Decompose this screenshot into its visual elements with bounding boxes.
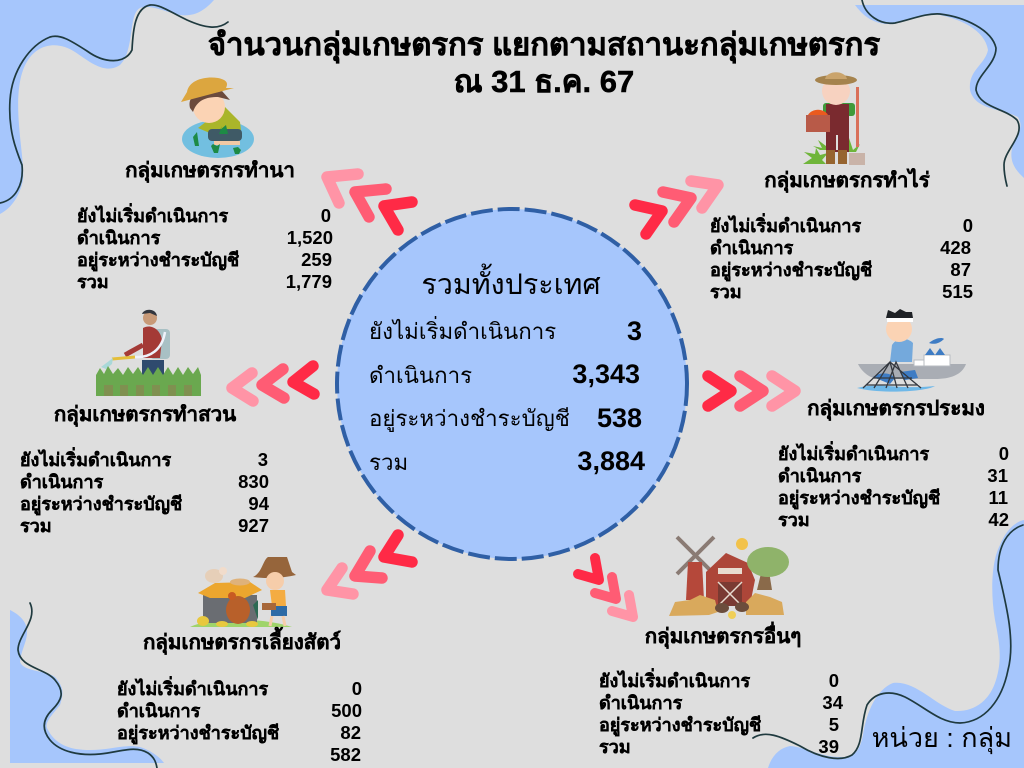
panel: field crop group figures: 87 [950,259,971,280]
heading: fishery group: กลุ่มเกษตรกรประมง [807,397,985,421]
decorative corner: bottom left [10,603,164,768]
heading: other group: กลุ่มเกษตรกรอื่นๆ [645,621,801,649]
panel: livestock group figures: อยู่ระหว่างชำระบัญชี [117,723,279,745]
panel: field crop group figures: ดำเนินการ [710,238,794,258]
panel: livestock group figures: 500 [331,700,362,721]
panel: orchard group figures [20,447,270,536]
panel: national total circle [337,209,687,559]
panel: other group figures: ดำเนินการ [599,693,683,713]
arrows: to livestock group [327,535,412,594]
national row: operating [369,359,640,389]
arrows: to rice group [327,174,412,230]
national row: total: รวม [369,450,408,475]
unit note: หน่วย : กลุ่ม [872,723,1012,755]
national row: liquidating: อยู่ระหว่างชำระบัญชี [369,406,570,432]
national row: not started: ยังไม่เริ่มดำเนินการ [369,316,556,344]
panel: livestock group figures: 82 [340,722,361,743]
decorative corner: top right [855,0,1024,186]
national row: operating: ดำเนินการ [369,363,472,388]
arrows: to orchard group [232,366,314,401]
panel: rice group figures: ดำเนินการ [77,228,161,248]
panel: other group figures: 5 [829,714,839,735]
decorative corner: bottom right [753,520,1024,768]
panel: rice group figures: รวม [77,272,109,292]
panel: livestock group figures: ยังไม่เริ่มดำเนินการ [117,676,269,699]
heading: national total: รวมทั้งประเทศ [421,264,601,301]
national row: operating: 3,343 [572,359,640,389]
panel: other group figures: ยังไม่เริ่มดำเนินการ [599,668,751,691]
title: ณ 31 ธ.ค. 67 [454,64,634,99]
national row: not started: 3 [627,316,642,346]
national row: liquidating: 538 [597,403,642,433]
title [208,27,880,99]
panel: livestock group figures: ดำเนินการ [117,701,201,721]
panel: orchard group figures: 927 [238,515,269,536]
panel: rice group figures: 0 [321,205,331,226]
panel: livestock group figures: 0 [352,678,362,699]
panel: other group figures: 39 [818,736,839,757]
panel: rice group figures: 259 [301,249,332,270]
panel: rice group figures: อยู่ระหว่างชำระบัญชี [77,250,239,272]
panel: fishery group figures: 0 [999,443,1009,464]
icon: field crop farmer [803,72,865,165]
panel: fishery group figures [778,441,1009,530]
panel: field crop group figures [710,213,973,302]
panel: field crop group figures: 428 [940,237,971,258]
icon: farm barn [669,537,789,619]
panel: field crop group figures: รวม [710,282,742,302]
icon: poultry farmer [190,557,296,627]
panel: rice group figures: 1,779 [286,271,332,292]
panel: orchard group figures: ดำเนินการ [20,472,104,492]
panel: fishery group figures: ยังไม่เริ่มดำเนินการ [778,441,930,464]
heading: orchard group: กลุ่มเกษตรกรทำสวน [54,403,236,427]
panel: fishery group figures: 31 [987,465,1008,486]
panel: rice group figures: ยังไม่เริ่มดำเนินการ [77,203,229,226]
panel: other group figures: อยู่ระหว่างชำระบัญชี [599,715,761,737]
panel: orchard group figures: อยู่ระหว่างชำระบัญชี [20,494,182,516]
panel: fishery group figures: อยู่ระหว่างชำระบัญชี [778,488,940,510]
arrows: to fishery group [708,376,795,406]
heading: rice group: กลุ่มเกษตรกรทำนา [125,159,295,183]
panel: livestock group figures [117,676,362,765]
panel: field crop group figures: 515 [942,281,973,302]
panel: field crop group figures: 0 [963,215,973,236]
panel: orchard group figures: 94 [248,493,270,514]
icon: orchard sprayer [96,310,201,396]
decorative corner: top left [0,0,228,214]
heading: livestock group: กลุ่มเกษตรกรเลี้ยงสัตว์ [143,626,341,655]
panel: orchard group figures: รวม [20,516,52,536]
panel: field crop group figures: ยังไม่เริ่มดำเนินการ [710,213,862,236]
panel: orchard group figures: ยังไม่เริ่มดำเนินการ [20,447,172,470]
heading: field crop group: กลุ่มเกษตรกรทำไร่ [764,168,930,193]
arrows: to field crop group [635,181,718,234]
panel: other group figures: รวม [599,737,631,757]
panel: fishery group figures: ดำเนินการ [778,466,862,486]
national row: total: 3,884 [577,446,645,476]
panel: other group figures: 0 [829,670,839,691]
national row: total [369,446,645,476]
title: จำนวนกลุ่มเกษตรกร แยกตามสถานะกลุ่มเกษตรกร [208,27,880,64]
panel: fishery group figures: 11 [988,487,1008,508]
panel: rice group figures: 1,520 [287,227,333,248]
panel: other group figures: 34 [822,692,844,713]
panel: orchard group figures: 830 [238,471,269,492]
icon: rice farmer [181,78,254,158]
panel: orchard group figures: 3 [258,449,268,470]
national row: not started [369,316,642,346]
panel: fishery group figures: รวม [778,510,810,530]
national row: liquidating [369,403,642,433]
panel: other group figures [599,668,844,757]
panel: rice group figures [77,203,333,292]
panel: fishery group figures: 42 [988,509,1009,530]
panel: field crop group figures: อยู่ระหว่างชำระบัญชี [710,260,872,282]
panel: livestock group figures: 582 [330,744,361,765]
icon: fisherman on boat [857,309,966,392]
arrows: to other group [578,558,633,617]
